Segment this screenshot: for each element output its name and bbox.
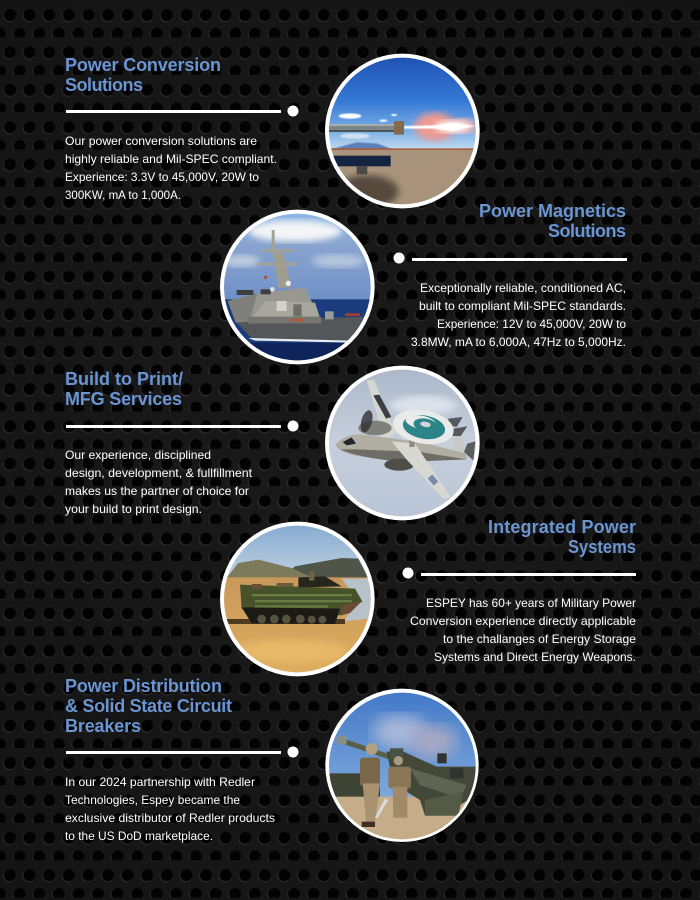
section: Build to Print / MFG Services (65, 369, 298, 516)
photo: navy destroyer (215, 206, 382, 366)
body text: 300KW, mA to 1,000A. (65, 188, 181, 202)
section: Power Conversion Solutions (65, 55, 298, 202)
heading: Power Conversion (65, 55, 221, 75)
heading: Systems (568, 537, 636, 557)
body text: ESPEY has 60+ years of Military Power (426, 596, 636, 610)
body text: your build to print design. (65, 502, 202, 516)
body text: Our power conversion solutions are (65, 134, 257, 148)
body text: exclusive distributor of Redler products (65, 811, 275, 825)
heading: Integrated Power (488, 517, 636, 537)
connector line and dot (394, 252, 627, 264)
connector line and dot (402, 568, 636, 578)
section: Power Distribution and Solid State Circuit Breakers (65, 676, 298, 843)
heading: Build to Print/ (65, 369, 183, 389)
body text: In our 2024 partnership with Redler (65, 775, 255, 789)
photo: naval gun firing (320, 50, 487, 210)
heading: Power Magnetics (479, 201, 626, 221)
connector line and dot (66, 420, 298, 432)
body text: to the US DoD marketplace. (65, 829, 213, 843)
body text: Technologies, Espey became the (65, 793, 240, 807)
connector line and dot (66, 746, 298, 758)
body text: Our experience, disciplined (65, 448, 211, 462)
body text: built to compliant Mil-SPEC standards. (419, 299, 626, 313)
section: Integrated Power Systems (402, 517, 636, 664)
body text: to the challanges of Energy Storage (443, 632, 636, 646)
heading: MFG Services (65, 389, 182, 409)
body text: Experience: 12V to 45,000V, 20W to (437, 317, 626, 331)
section: Power Magnetics Solutions (394, 201, 627, 349)
heading: & Solid State Circuit (65, 696, 232, 716)
body text: highly reliable and Mil-SPEC compliant. (65, 152, 277, 166)
body text: makes us the partner of choice for (65, 484, 249, 498)
body text: Systems and Direct Energy Weapons. (434, 650, 636, 664)
body text: 3.8MW, mA to 6,000A, 47Hz to 5,000Hz. (411, 335, 626, 349)
heading: Breakers (65, 716, 141, 736)
photo: amphibious assault vehicle on beach (220, 522, 375, 676)
heading: Solutions (65, 75, 143, 95)
body text: design, development, & fullfillment (65, 466, 253, 480)
body text: Experience: 3.3V to 45,000V, 20W to (65, 170, 259, 184)
body text: Conversion experience directly applicable (410, 614, 636, 628)
connector line and dot (66, 106, 298, 116)
heading: Power Distribution (65, 676, 222, 696)
body text: Exceptionally reliable, conditioned AC, (420, 281, 626, 295)
heading: Solutions (548, 221, 626, 241)
photo: E-2 Hawkeye aircraft (320, 362, 487, 522)
photo: marines with howitzer (325, 688, 479, 842)
